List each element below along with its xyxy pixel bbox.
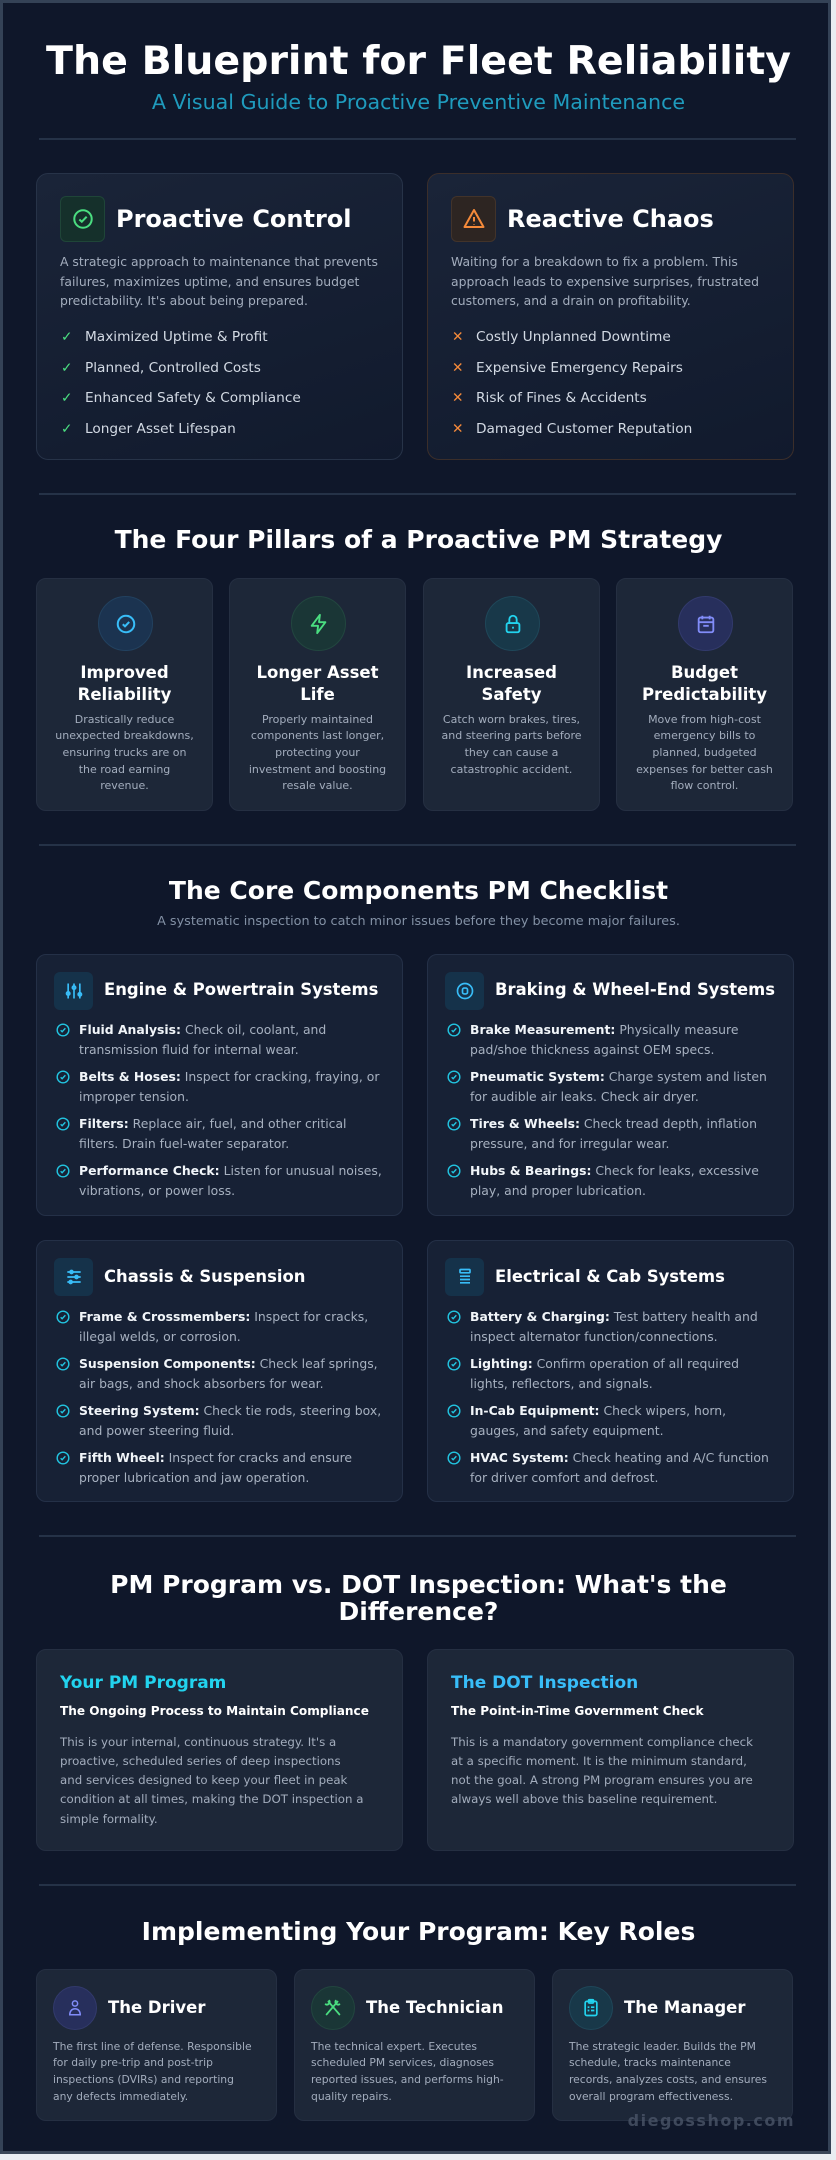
title: Budget — [671, 663, 738, 682]
description: planned, budgeted — [652, 746, 757, 759]
title: The Driver — [108, 1998, 206, 2017]
description: Drastically reduce — [75, 712, 174, 726]
panel: your PM program — [36, 1649, 403, 1851]
title: Predictability — [642, 685, 767, 704]
panel: pillar increased safety — [423, 578, 600, 811]
list items: Hubs & Bearings: Check for leaks, excessive — [470, 1163, 759, 1178]
description — [442, 712, 582, 776]
body: and services designed to keep your fleet in peak — [60, 1773, 347, 1787]
heading: Proactive Control — [116, 205, 352, 233]
title — [642, 663, 767, 704]
subheading: The Point-in-Time Government Check — [451, 1704, 704, 1718]
list: benefits: ✓ — [61, 390, 72, 406]
body: This is your internal, continuous strategy. It's a — [60, 1734, 336, 1748]
list: risks: ✕ — [452, 420, 463, 436]
list items — [56, 1309, 381, 1484]
heading: Braking & Wheel-End Systems — [495, 980, 775, 999]
list items: inspect alternator function/connections. — [470, 1328, 718, 1344]
heading: The DOT Inspection — [451, 1673, 638, 1693]
icon: warning — [451, 196, 496, 242]
list items: transmission fluid for internal wear. — [79, 1042, 299, 1056]
list items: HVAC System: Check heating and A/C function — [470, 1450, 769, 1465]
panel: technician — [294, 1969, 535, 2121]
description — [55, 712, 194, 792]
description: ensuring trucks are on — [63, 746, 186, 759]
description: customers, and a drain on profitability. — [451, 293, 691, 308]
body: condition at all times, making the DOT inspection a — [60, 1792, 363, 1806]
heading: PM vs DOT — [110, 1570, 727, 1626]
title — [256, 663, 378, 704]
icon: bolt — [291, 596, 346, 651]
list items: play, and proper lubrication. — [470, 1182, 646, 1198]
panel: pillar budget predictability — [616, 578, 793, 811]
list items: filters. Drain fuel-water separator. — [79, 1136, 289, 1150]
panel: pillar longer asset life — [229, 578, 406, 811]
panel: reactive chaos — [427, 173, 794, 460]
description: investment and boosting — [249, 763, 386, 776]
description: resale value. — [282, 779, 353, 792]
title: Improved — [80, 663, 169, 682]
heading: PM vs DOT: PM Program vs. DOT Inspection: What's the — [110, 1570, 727, 1599]
description — [310, 2040, 504, 2103]
list items: Steering System: Check tie rods, steering box, — [79, 1403, 381, 1418]
panel: proactive control — [36, 173, 403, 460]
description — [52, 2040, 252, 2103]
icon: battery stack — [445, 1258, 484, 1296]
list items: Fifth Wheel: Inspect for cracks and ensure — [79, 1450, 352, 1465]
title: Longer Asset — [256, 663, 378, 682]
description: they can cause a — [465, 746, 558, 759]
title — [78, 663, 172, 704]
watermark: diegosshop.com — [628, 2111, 795, 2130]
icon: check circle — [98, 596, 153, 651]
icon: lock — [485, 596, 540, 651]
body: at a specific moment. It is the minimum standard, — [451, 1754, 747, 1768]
description: any defects immediately. — [53, 2090, 188, 2103]
icon: wrench — [311, 1986, 355, 2030]
description: components last longer, — [251, 729, 384, 742]
title: The Blueprint for Fleet Reliability — [46, 38, 791, 84]
title: Safety — [481, 685, 542, 704]
list items: pad/shoe thickness against OEM specs. — [470, 1042, 714, 1056]
list items — [448, 1022, 767, 1198]
heading: Electrical & Cab Systems — [495, 1267, 725, 1286]
description: failures, maximizes uptime, and ensures budget — [60, 274, 359, 288]
body — [450, 1734, 753, 1806]
list items: Tires & Wheels: Check tread depth, inflation — [470, 1116, 757, 1131]
list items: illegal welds, or corrosion. — [79, 1328, 241, 1344]
description: overall program effectiveness. — [569, 2090, 733, 2103]
panel: electrical & cab — [427, 1240, 794, 1502]
description: approach leads to expensive surprises, frustrated — [451, 274, 759, 288]
description: predictability. It's about being prepared. — [60, 293, 308, 308]
icon: person — [53, 1986, 97, 2030]
description — [249, 712, 386, 792]
list: benefits: ✓ — [61, 420, 72, 436]
description: the road earning — [79, 763, 170, 776]
panel: DOT inspection — [427, 1649, 794, 1851]
description: The first line of defense. Responsible — [53, 2040, 252, 2052]
description: A strategic approach to maintenance that prevents — [60, 254, 378, 269]
heading: Engine & Powertrain Systems — [104, 980, 378, 999]
icon: sliders — [54, 972, 93, 1010]
list: benefits — [61, 329, 301, 436]
description: expenses for better cash — [636, 763, 773, 776]
body: This is a mandatory government compliance check — [451, 1734, 753, 1748]
list items: gauges, and safety equipment. — [470, 1422, 664, 1438]
heading: Chassis & Suspension — [104, 1267, 305, 1286]
subtitle: A Visual Guide to Proactive Preventive Maintenance — [152, 90, 685, 114]
description: Move from high-cost — [648, 712, 761, 726]
list items: improper tension. — [79, 1088, 189, 1104]
heading: Your PM Program — [60, 1673, 226, 1693]
description — [60, 254, 378, 308]
list items: Filters: Replace air, fuel, and other critical — [79, 1116, 346, 1131]
list: risks: Risk of Fines & Accidents — [476, 390, 647, 406]
icon: clipboard — [569, 1986, 613, 2030]
title: Increased — [466, 663, 557, 682]
panel: braking & wheel-end — [427, 954, 794, 1216]
heading: Reactive Chaos — [507, 205, 714, 233]
subheading: The Ongoing Process to Maintain Compliance — [60, 1704, 369, 1718]
panel: engine & powertrain — [36, 954, 403, 1216]
list items: proper lubrication and jaw operation. — [79, 1470, 309, 1484]
icon: check circle — [60, 196, 105, 242]
list items: for audible air leaks. Check air dryer. — [470, 1088, 699, 1104]
description: revenue. — [100, 779, 149, 792]
description: and steering parts before — [442, 729, 582, 742]
title: The Technician — [366, 1998, 503, 2017]
list items: Performance Check: Listen for unusual noises, — [79, 1163, 382, 1178]
list: risks — [452, 329, 692, 436]
panel: pillar improved reliability — [36, 578, 213, 811]
list items: Brake Measurement: Physically measure — [470, 1022, 738, 1037]
list: benefits: Enhanced Safety & Compliance — [85, 390, 301, 406]
title: Life — [300, 685, 335, 704]
description: Catch worn brakes, tires, — [443, 712, 580, 726]
list items: Pneumatic System: Charge system and listen — [470, 1069, 767, 1084]
description: catastrophic accident. — [451, 763, 572, 776]
description: records, analyzes costs, and ensures — [569, 2073, 767, 2086]
list items: air bags, and shock absorbers for wear. — [79, 1376, 324, 1390]
description: unexpected breakdowns, — [55, 729, 194, 742]
title — [466, 663, 557, 704]
list items: Frame & Crossmembers: Inspect for cracks, — [79, 1309, 368, 1324]
list items: lights, reflectors, and signals. — [470, 1376, 653, 1390]
heading: PM vs DOT: Difference? — [339, 1597, 498, 1626]
description: Properly maintained — [262, 712, 373, 726]
list: risks: Expensive Emergency Repairs — [476, 360, 683, 376]
list items: vibrations, or power loss. — [79, 1182, 235, 1198]
icon: adjustments — [54, 1258, 93, 1296]
list items: and power steering fluid. — [79, 1422, 234, 1438]
list items: pressure, and for irregular wear. — [470, 1136, 669, 1150]
list items — [448, 1309, 769, 1484]
subtitle: checklist: A systematic inspection to catch minor issues before they become major failures. — [157, 914, 680, 929]
list items: Lighting: Confirm operation of all required — [470, 1356, 739, 1371]
list items — [56, 1022, 382, 1198]
list: risks: ✕ — [452, 360, 463, 376]
body: not the goal. A strong PM program ensures you are — [451, 1773, 753, 1787]
list: risks: ✕ — [452, 390, 463, 406]
description: emergency bills to — [654, 729, 755, 742]
list: risks: Costly Unplanned Downtime — [476, 329, 671, 345]
heading: key roles: Implementing Your Program: Key Roles — [142, 1917, 695, 1946]
description: scheduled PM services, diagnoses — [311, 2056, 494, 2069]
list items: Suspension Components: Check leaf springs, — [79, 1356, 378, 1371]
panel: driver — [36, 1969, 277, 2121]
list: benefits: ✓ — [61, 360, 72, 376]
title: The Manager — [624, 1998, 746, 2017]
description: protecting your — [275, 746, 360, 759]
description: schedule, tracks maintenance — [569, 2056, 731, 2069]
description — [451, 254, 759, 308]
description: The strategic leader. Builds the PM — [569, 2040, 756, 2052]
description: Waiting for a breakdown to fix a problem. This — [451, 254, 738, 269]
list items: Fluid Analysis: Check oil, coolant, and — [79, 1022, 326, 1037]
description — [568, 2040, 767, 2103]
list: risks: ✕ — [452, 329, 463, 345]
list items: In-Cab Equipment: Check wipers, horn, — [470, 1403, 726, 1418]
list items: Belts & Hoses: Inspect for cracking, fraying, or — [79, 1069, 379, 1084]
body: always well above this baseline requirement. — [451, 1792, 717, 1806]
panel: chassis & suspension — [36, 1240, 403, 1502]
description: The technical expert. Executes — [311, 2040, 477, 2052]
description: flow control. — [671, 779, 738, 792]
body: simple formality. — [60, 1812, 158, 1826]
icon: calendar — [678, 596, 733, 651]
icon: disc — [445, 972, 484, 1010]
list: risks: Damaged Customer Reputation — [476, 420, 692, 436]
list items: for driver comfort and defrost. — [470, 1470, 658, 1484]
description: quality repairs. — [311, 2090, 392, 2103]
list: benefits: Maximized Uptime & Profit — [85, 329, 268, 345]
list: benefits: Planned, Controlled Costs — [85, 360, 261, 376]
body — [60, 1734, 363, 1826]
description: reported issues, and performs high- — [311, 2073, 504, 2086]
description: for daily pre-trip and post-trip — [53, 2056, 213, 2069]
list: benefits: ✓ — [61, 329, 72, 345]
body: proactive, scheduled series of deep inspections — [60, 1754, 341, 1768]
panel: manager — [552, 1969, 793, 2121]
list items: Battery & Charging: Test battery health and — [470, 1309, 758, 1324]
list: benefits: Longer Asset Lifespan — [85, 420, 236, 436]
heading: checklist: The Core Components PM Checklist — [169, 876, 668, 905]
heading: four pillars: The Four Pillars of a Proactive PM Strategy — [115, 525, 722, 554]
description — [636, 712, 773, 792]
title: Reliability — [78, 685, 171, 704]
description: inspections (DVIRs) and reporting — [53, 2073, 234, 2086]
